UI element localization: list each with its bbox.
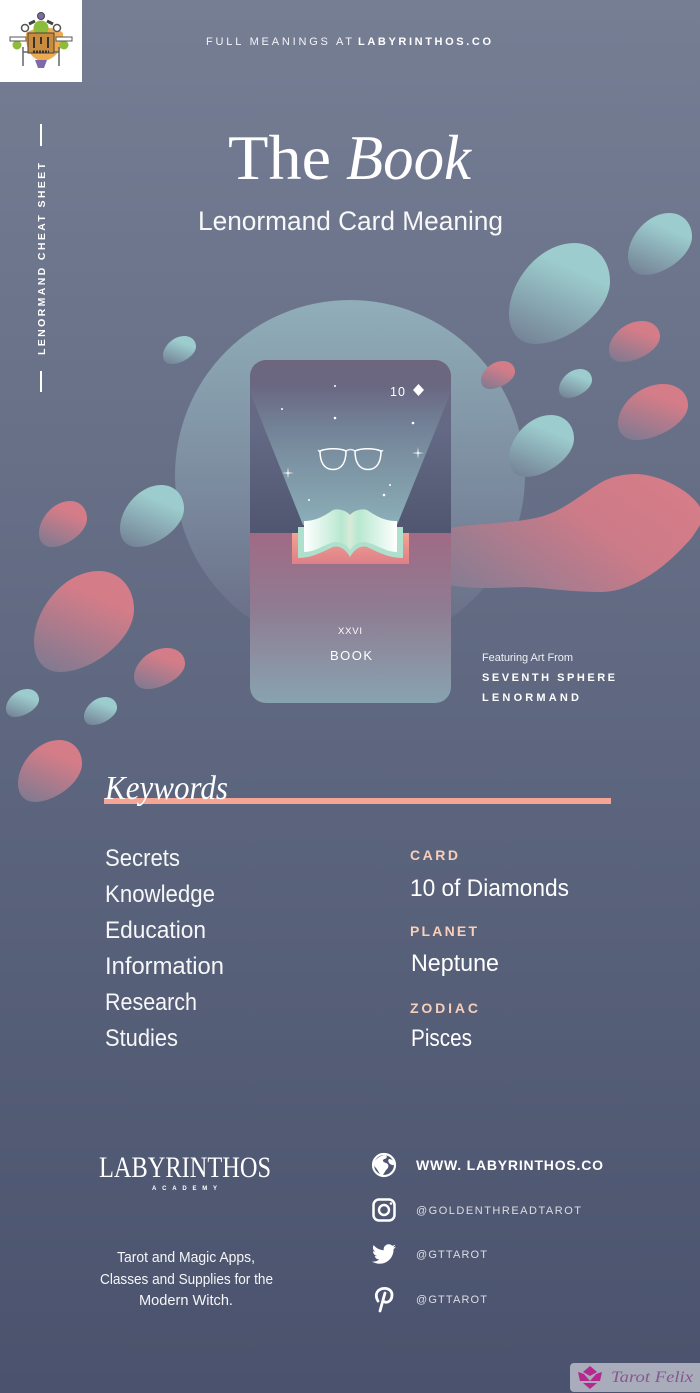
brand tagline: Modern Witch. bbox=[139, 1293, 233, 1309]
stars bbox=[281, 385, 424, 501]
website link: WWW. LABYRINTHOS.CO bbox=[416, 1157, 603, 1173]
brand tagline bbox=[100, 1250, 273, 1309]
card number and suit bbox=[390, 384, 424, 399]
keyword list: Studies bbox=[105, 1025, 178, 1052]
watermark: Tarot Felix: Tarot Felix bbox=[611, 1369, 693, 1386]
title bbox=[228, 122, 473, 193]
card correspondence: 10 of Diamonds bbox=[410, 875, 569, 902]
subtitle: Lenormand Card Meaning bbox=[198, 206, 503, 236]
card upper panel bbox=[250, 360, 451, 533]
planet correspondence: Neptune bbox=[411, 950, 499, 977]
keyword list: Information bbox=[105, 953, 224, 980]
card lower panel bbox=[250, 533, 451, 703]
planet correspondence: PLANET bbox=[410, 923, 477, 939]
watermark: Tarot Felix bbox=[570, 1363, 700, 1392]
floating blobs bbox=[6, 213, 692, 802]
keyword list: Knowledge bbox=[105, 881, 215, 908]
zodiac correspondence bbox=[410, 1000, 478, 1052]
art credit: Featuring Art From bbox=[482, 652, 573, 664]
pinterest link bbox=[376, 1288, 487, 1311]
icon: twitter bbox=[372, 1244, 396, 1264]
instagram link: @GOLDENTHREADTAROT bbox=[416, 1205, 581, 1217]
icon: lotus bbox=[578, 1366, 602, 1389]
art credit: LENORMAND bbox=[482, 692, 579, 704]
planet correspondence bbox=[410, 923, 499, 977]
zodiac correspondence: Pisces bbox=[411, 1025, 472, 1052]
card correspondence: CARD bbox=[410, 847, 458, 863]
keywords heading: Keywords bbox=[104, 770, 228, 807]
header link: FULL MEANINGS AT bbox=[206, 36, 352, 48]
card name: BOOK bbox=[330, 648, 372, 663]
website link bbox=[373, 1154, 603, 1176]
keyword list: Education bbox=[105, 917, 206, 944]
icon: glasses bbox=[318, 449, 383, 470]
icon: pinterest bbox=[376, 1288, 392, 1311]
art credit: SEVENTH SPHERE bbox=[482, 672, 615, 684]
side label: Lenormand cheat sheet: LENORMAND CHEAT SHEET bbox=[36, 162, 48, 355]
twitter link: @GTTAROT bbox=[416, 1249, 487, 1261]
pinterest link: @GTTAROT bbox=[416, 1294, 487, 1306]
card numeral: XXVI bbox=[338, 626, 362, 637]
keywords heading bbox=[104, 770, 611, 807]
decorative circle bbox=[175, 300, 525, 650]
light beam bbox=[250, 386, 451, 525]
keyword list: Secrets bbox=[105, 845, 180, 872]
brand tagline: Tarot and Magic Apps, bbox=[117, 1250, 255, 1266]
zodiac correspondence: ZODIAC bbox=[410, 1000, 478, 1016]
card number and suit: 10 bbox=[390, 385, 405, 399]
brand tagline: Classes and Supplies for the bbox=[100, 1272, 273, 1288]
logo tile bbox=[0, 0, 82, 82]
icon: open book bbox=[292, 509, 409, 564]
large pink blob bbox=[430, 474, 700, 592]
keyword list: Research bbox=[105, 989, 197, 1016]
art credit bbox=[482, 652, 615, 704]
icon: instagram bbox=[374, 1200, 394, 1220]
keyword list bbox=[105, 845, 224, 1052]
title: Book bbox=[346, 122, 473, 193]
brand logo: ACADEMY bbox=[152, 1186, 217, 1192]
header link bbox=[206, 36, 491, 48]
instagram link bbox=[374, 1200, 581, 1220]
card correspondence bbox=[410, 847, 569, 902]
title: The bbox=[228, 122, 331, 193]
header link: LABYRINTHOS.CO bbox=[358, 36, 491, 48]
icon: globe bbox=[373, 1154, 395, 1176]
twitter link bbox=[372, 1244, 487, 1264]
brand logo: LABYRINTHOS bbox=[99, 1151, 271, 1184]
card bbox=[250, 360, 451, 703]
brand logo bbox=[99, 1151, 271, 1192]
